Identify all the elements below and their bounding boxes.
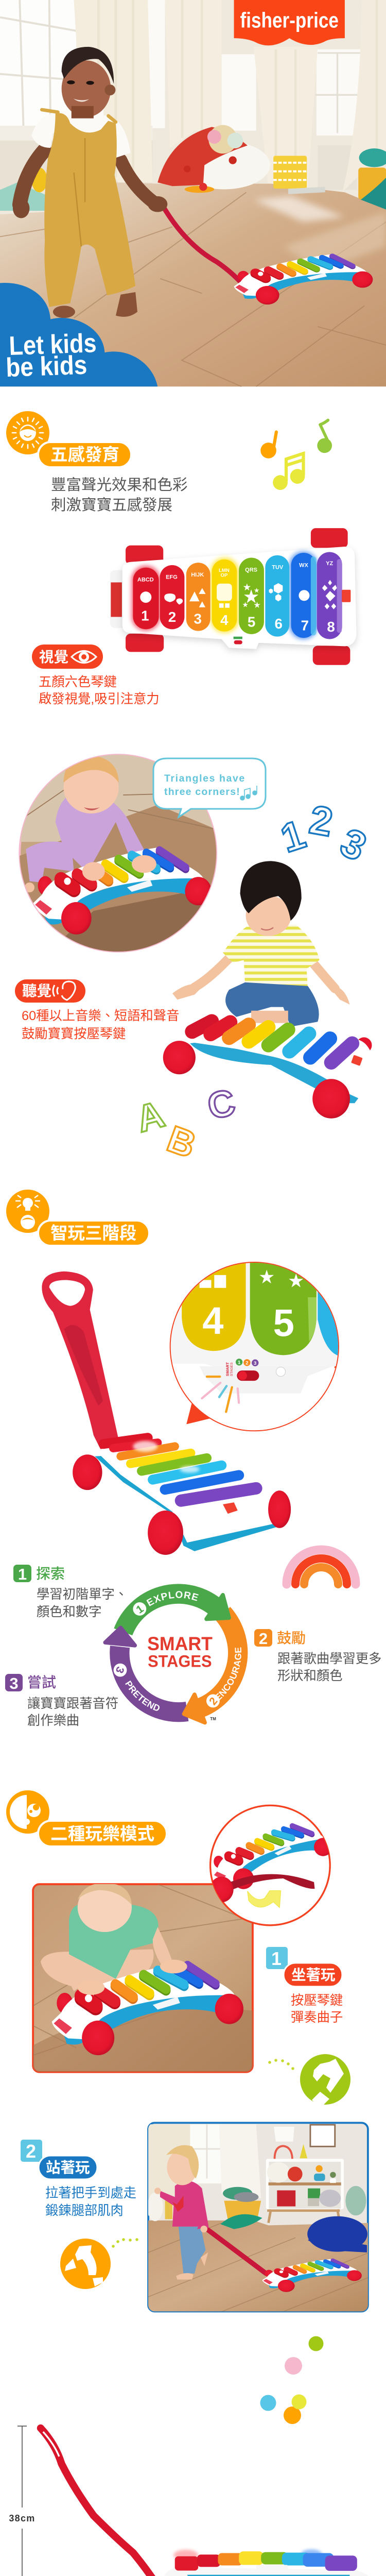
mode 2 number tag and label: standing: 鍛鍊腿部肌肉	[45, 2204, 124, 2218]
text block: five senses description: 刺激寶寶五感發展	[51, 497, 172, 514]
icon: music notes	[260, 420, 332, 490]
mode 1 number tag and label: sitting: 1	[271, 1948, 282, 1969]
mode 1 number tag and label: sitting: 彈奏曲子	[291, 2010, 343, 2025]
blue cloud slogan: Let kids be kids	[0, 283, 157, 386]
text block: hearing description: 60種以上音樂、短語和聲音	[22, 1009, 179, 1023]
zoom circle: folding handle	[206, 1805, 337, 1925]
key numbers	[141, 608, 335, 635]
stage 1 label: explore: 探索	[36, 1566, 65, 1582]
smart stages switch badge: 2	[245, 1361, 249, 1366]
blue cloud slogan: Let kids be kids: be kids	[5, 350, 87, 382]
stage 2 label: encourage: 鼓勵	[277, 1630, 306, 1646]
key numbers: 1	[141, 608, 149, 624]
step badges: 2	[207, 1695, 220, 1707]
key labels: ABCD	[137, 577, 154, 583]
decorative letters A B C	[132, 1081, 239, 1166]
icon: peekaboo face behind a wall	[10, 1795, 41, 1829]
zoom circle: smart stages switch: ★	[288, 1273, 304, 1290]
smart stages ring diagram	[103, 1584, 248, 1725]
section heading: five senses	[6, 411, 131, 467]
icon: eye	[72, 651, 96, 663]
stage 2 label: encourage: 形狀和顏色	[277, 1669, 343, 1683]
key numbers: 8	[327, 619, 335, 635]
toddler	[154, 2145, 266, 2280]
height dimension: 38cm: 38cm	[9, 2513, 36, 2523]
bookshelf	[266, 2159, 344, 2223]
height dimension: 38cm	[9, 2426, 36, 2576]
stage 1 label: explore: 1	[18, 1565, 27, 1583]
key labels: TUV	[272, 565, 284, 571]
ring labels: EXPLORE	[146, 1591, 199, 1606]
key labels: QRS	[245, 567, 257, 573]
ring labels: ENCOURAGE	[216, 1648, 241, 1700]
key labels: OP	[221, 572, 228, 578]
key labels	[137, 561, 334, 583]
step badges: 1	[134, 1603, 146, 1616]
center wordmark: STAGES	[148, 1652, 212, 1670]
speech bubble: Triangles have	[164, 773, 245, 784]
ring labels: PRETEND	[125, 1681, 160, 1711]
decorative numbers 1 2 3: 2	[306, 796, 336, 845]
section heading: five senses: 五感發育	[50, 446, 119, 465]
side view product with handle	[41, 2428, 377, 2576]
text block: five senses description	[51, 477, 188, 514]
mode 2 number tag and label: standing: 2	[26, 2141, 36, 2162]
key numbers: 7	[301, 618, 309, 634]
ring arcs	[119, 1594, 238, 1712]
smart stages ring diagram: TM	[210, 1717, 216, 1721]
decorative colored dots	[260, 2336, 323, 2424]
text block: hearing description: 鼓勵寶寶按壓琴鍵	[22, 1027, 126, 1041]
key labels: YZ	[326, 561, 334, 567]
smart stages switch badge: 3	[254, 1361, 256, 1366]
arrow heads	[105, 1595, 229, 1723]
key labels: EFG	[166, 574, 178, 581]
zoom circle: smart stages switch: 5	[273, 1302, 294, 1345]
child figure	[13, 47, 247, 318]
toy, seen from the key side	[163, 1021, 373, 1118]
key labels: WX	[299, 563, 309, 569]
speech bubble: three corners!	[164, 786, 240, 798]
keys with glow: ★	[254, 588, 259, 594]
stage 3 label: pretend: 3	[9, 1674, 19, 1692]
step badges: 3	[113, 1665, 126, 1675]
mode 1 number tag and label: sitting: 坐著玩	[291, 1967, 336, 1984]
key numbers: 3	[194, 611, 202, 626]
icon: light bulb over child head	[15, 1195, 40, 1229]
callout pill: vision: 視覺	[39, 649, 68, 666]
keys with glow: ★	[254, 601, 260, 609]
icon: sun face	[12, 417, 43, 448]
icon: orange legs walking	[60, 2238, 138, 2289]
stage 2 label: encourage	[254, 1629, 381, 1683]
mode 2 number tag and label: standing: 拉著把手到處走	[45, 2186, 136, 2200]
text block: hearing description	[22, 1009, 179, 1041]
stage 3 label: pretend	[5, 1674, 118, 1728]
smart stages switch badge: 1	[238, 1360, 241, 1366]
text block: vision description: 五顏六色琴鍵	[39, 675, 117, 689]
smart stages switch badge: SMART	[225, 1362, 230, 1376]
callout pill: hearing: 聽覺	[22, 983, 51, 999]
stage 2 label: encourage: 2	[259, 1630, 268, 1648]
stage 1 label: explore: 學習初階單字、	[37, 1587, 128, 1602]
fisher-price logo: fisher-price	[240, 8, 339, 32]
key numbers: 6	[274, 616, 283, 632]
key labels: HIJK	[191, 572, 204, 578]
smart stages switch badge	[225, 1359, 286, 1381]
decorative letters A B C: B	[162, 1118, 201, 1166]
zoom circle: smart stages switch: 4	[202, 1299, 224, 1342]
mode 2 number tag and label: standing: 站著玩	[46, 2160, 90, 2176]
decorative numbers 1 2 3: 1	[275, 811, 311, 861]
stage 1 label: explore	[13, 1565, 128, 1619]
center wordmark	[147, 1633, 213, 1670]
circular photo: baby playing with the keys	[17, 753, 219, 955]
key labels: LMN	[219, 568, 230, 573]
text block: vision description: 啟發視覺,吸引注意力	[39, 692, 160, 706]
stage 3 label: pretend: 嘗試	[27, 1674, 56, 1690]
blue cloud slogan: Let kids be kids: Let kids	[9, 328, 97, 361]
icon: green hand pressing block	[268, 2054, 350, 2108]
keys with glow: ★	[243, 583, 251, 592]
step badges	[113, 1602, 220, 1707]
decorative numbers 1 2 3	[275, 796, 373, 870]
hero photo: child pulling the toy	[0, 0, 386, 386]
stage 2 label: encourage: 跟著歌曲學習更多	[277, 1652, 381, 1666]
stage 1 label: explore: 顏色和數字	[37, 1605, 102, 1619]
icon: ear	[53, 981, 75, 1000]
key numbers: 4	[220, 612, 229, 628]
section heading: two play modes	[6, 1790, 167, 1846]
zoom circle: smart stages switch: ★	[259, 1269, 274, 1286]
child sitting with toy	[163, 861, 373, 1118]
zoom circle: smart stages switch	[170, 1263, 341, 1430]
stage 3 label: pretend: 讓寶寶跟著音符	[27, 1697, 118, 1711]
text block: five senses description: 豐富聲光效果和色彩	[51, 477, 188, 494]
fisher-price logo	[234, 0, 345, 45]
ring labels	[125, 1591, 241, 1711]
callout pill: vision	[32, 645, 103, 669]
smart stages switch badge: STAGES	[230, 1362, 234, 1376]
key numbers: 5	[248, 614, 255, 630]
icon: curved arrow	[248, 1891, 280, 1907]
icon: music notes	[240, 786, 257, 800]
photo: baby sitting and playing	[33, 1883, 254, 2073]
center wordmark: SMART	[147, 1633, 213, 1654]
section heading: three smart stages: 智玩三階段	[50, 1224, 137, 1243]
decorative numbers 1 2 3: 3	[334, 819, 373, 870]
key numbers: 2	[168, 609, 176, 625]
mode 1 number tag and label: sitting	[266, 1947, 343, 2025]
callout pill: hearing	[15, 979, 85, 1003]
icon: rainbow	[287, 1550, 356, 1584]
section heading: three smart stages	[6, 1190, 149, 1246]
product: top-down light-up xylophone	[110, 528, 356, 665]
mode 1 number tag and label: sitting: 按壓琴鍵	[291, 1993, 343, 2008]
keys with glow: ★	[243, 589, 259, 606]
decorative letters A B C: C	[204, 1081, 239, 1128]
section heading: two play modes: 二種玩樂模式	[50, 1824, 154, 1844]
product: toy with pull handle	[42, 1272, 291, 1555]
text block: vision description	[39, 675, 160, 706]
keys with glow: ★	[242, 601, 249, 608]
keys with glow	[132, 552, 342, 639]
decorative letters A B C: A	[132, 1094, 169, 1140]
mode 2 number tag and label: standing	[21, 2140, 136, 2218]
photo: toddler walking with toy in room	[147, 2123, 370, 2312]
stage 3 label: pretend: 創作樂曲	[27, 1714, 79, 1728]
speech bubble	[153, 758, 266, 817]
